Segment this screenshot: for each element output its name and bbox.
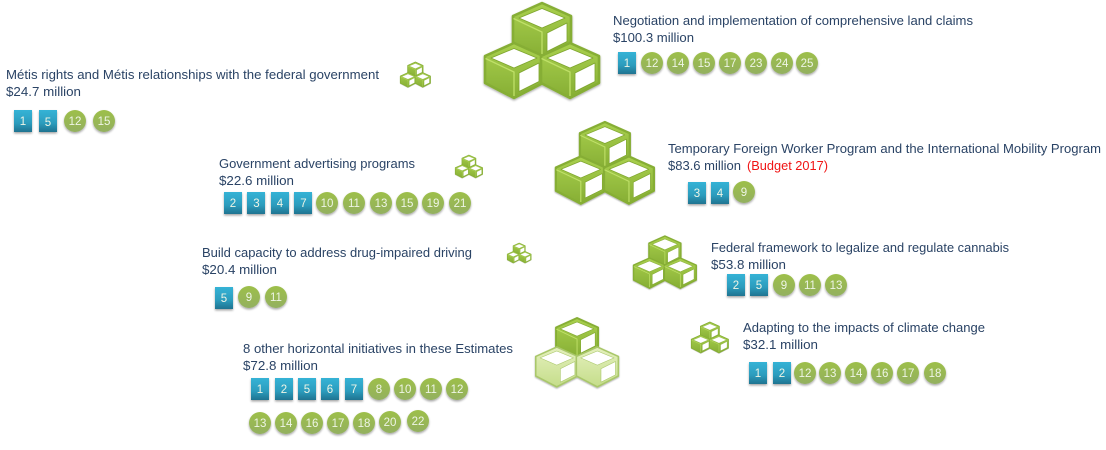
badges: land claims: 17: [724, 58, 736, 70]
badges: other initiatives: 2: [281, 384, 287, 396]
initiative: other initiatives: [243, 342, 513, 434]
heading: climate change: Adapting to the impacts of climate change: [743, 321, 985, 335]
heading: drug-impaired driving: Build capacity to address drug-impaired driving: [202, 246, 472, 260]
badges: advertising: 7: [300, 198, 307, 210]
badges: land claims: 23: [750, 58, 762, 70]
badges: other initiatives: [249, 378, 468, 434]
badges: climate change: 2: [779, 368, 785, 380]
badges: land claims: [618, 52, 818, 74]
badges: advertising: 2: [230, 198, 236, 210]
badges: advertising: 11: [348, 198, 360, 210]
icon: large cubes, land claims: [485, 3, 599, 98]
badges: cannabis: 5: [756, 280, 762, 292]
amount: land claims: $100.3 million: [613, 31, 694, 45]
amount: climate change: $32.1 million: [743, 338, 818, 352]
badges: other initiatives: 10: [399, 384, 411, 396]
badges: Métis: 5: [45, 117, 51, 129]
badges: climate change: 1: [755, 368, 761, 380]
badges: advertising: 13: [375, 198, 387, 210]
icon: medium cubes, cannabis: [634, 236, 696, 288]
heading: foreign worker: Temporary Foreign Worker Program and the International Mobility Program: [668, 142, 1101, 156]
badges: cannabis: 11: [804, 280, 816, 292]
heading: cannabis: Federal framework to legalize and regulate cannabis: [711, 241, 1009, 255]
badges: foreign worker: 9: [741, 187, 747, 199]
heading: advertising: Government advertising programs: [219, 157, 415, 171]
badges: other initiatives: 13: [254, 418, 266, 430]
heading: Métis: Métis rights and Métis relationships with the federal government: [6, 68, 380, 82]
amount: cannabis: $53.8 million: [711, 258, 786, 272]
badges: other initiatives: 7: [351, 384, 357, 396]
badges: climate change: 12: [799, 368, 811, 380]
badges: Métis: 1: [20, 116, 26, 128]
note: Budget 2017: (Budget 2017): [747, 159, 828, 173]
badges: land claims: 15: [698, 58, 710, 70]
initiative: drug-impaired driving: [202, 246, 472, 309]
amount: advertising: $22.6 million: [219, 174, 294, 188]
amount: other initiatives: $72.8 million: [243, 359, 318, 373]
initiative: foreign worker: [668, 142, 1101, 204]
badges: other initiatives: 1: [257, 384, 263, 396]
badges: drug-impaired driving: 5: [221, 293, 227, 305]
initiative: advertising: [219, 157, 471, 214]
badges: other initiatives: 6: [327, 384, 333, 396]
badges: foreign worker: 4: [717, 188, 724, 200]
badges: climate change: 17: [902, 368, 914, 380]
heading: other initiatives: 8 other horizontal initiatives in these Estimates: [243, 342, 513, 356]
badges: Métis: [14, 110, 115, 132]
badges: cannabis: 2: [733, 280, 739, 292]
icon: pale cubes, other initiatives: [536, 318, 618, 387]
amount: drug-impaired driving: $20.4 million: [202, 263, 277, 277]
badges: other initiatives: 18: [358, 418, 370, 430]
icon: small cubes, drug-impaired driving: [507, 243, 531, 263]
amount: Métis: $24.7 million: [6, 85, 81, 99]
badges: climate change: 16: [876, 368, 888, 380]
initiative: cannabis: [711, 241, 1009, 296]
badges: advertising: 10: [321, 198, 333, 210]
badges: Métis: 15: [98, 116, 110, 128]
badges: advertising: 3: [253, 198, 260, 210]
icon: small cubes, Métis: [400, 62, 430, 87]
badges: foreign worker: [688, 181, 755, 204]
badges: other initiatives: 14: [280, 418, 293, 430]
badges: other initiatives: 8: [376, 384, 382, 396]
badges: climate change: 18: [929, 368, 941, 380]
badges: advertising: 21: [454, 198, 466, 210]
initiative: climate change: [743, 321, 985, 384]
badges: other initiatives: 11: [425, 384, 437, 396]
badges: land claims: 14: [672, 58, 685, 70]
badges: advertising: 15: [401, 198, 413, 210]
badges: climate change: 13: [824, 368, 836, 380]
badges: other initiatives: 22: [412, 416, 424, 428]
icon: medium-large cubes, foreign worker: [556, 122, 654, 204]
badges: Métis: 12: [69, 116, 81, 128]
badges: land claims: 1: [624, 58, 630, 70]
badges: other initiatives: 16: [306, 418, 318, 430]
badges: drug-impaired driving: 11: [270, 292, 282, 304]
badges: other initiatives: 20: [384, 417, 396, 429]
badges: advertising: 4: [277, 198, 284, 210]
amount: foreign worker: $83.6 million: [668, 159, 741, 173]
badges: cannabis: 13: [830, 280, 842, 292]
badges: other initiatives: 17: [332, 418, 344, 430]
heading: land claims: Negotiation and implementation of comprehensive land claims: [613, 14, 973, 28]
icon: small cubes, advertising: [455, 155, 483, 178]
badges: advertising: 19: [427, 198, 439, 210]
icon: small cubes, climate change: [691, 322, 728, 353]
badges: cannabis: 9: [781, 280, 787, 292]
badges: advertising: [224, 192, 471, 214]
initiative: Métis: [6, 68, 380, 132]
badges: land claims: 24: [776, 58, 789, 70]
badges: other initiatives: 5: [304, 384, 310, 396]
badges: climate change: [749, 362, 946, 384]
badges: drug-impaired driving: [215, 286, 287, 309]
badges: land claims: 25: [801, 58, 813, 70]
badges: drug-impaired driving: 9: [246, 292, 252, 304]
badges: cannabis: [727, 274, 847, 296]
badges: climate change: 14: [850, 368, 863, 380]
badges: land claims: 12: [646, 58, 658, 70]
badges: other initiatives: 12: [451, 384, 463, 396]
initiative: land claims: [613, 14, 973, 74]
badges: foreign worker: 3: [694, 188, 700, 200]
